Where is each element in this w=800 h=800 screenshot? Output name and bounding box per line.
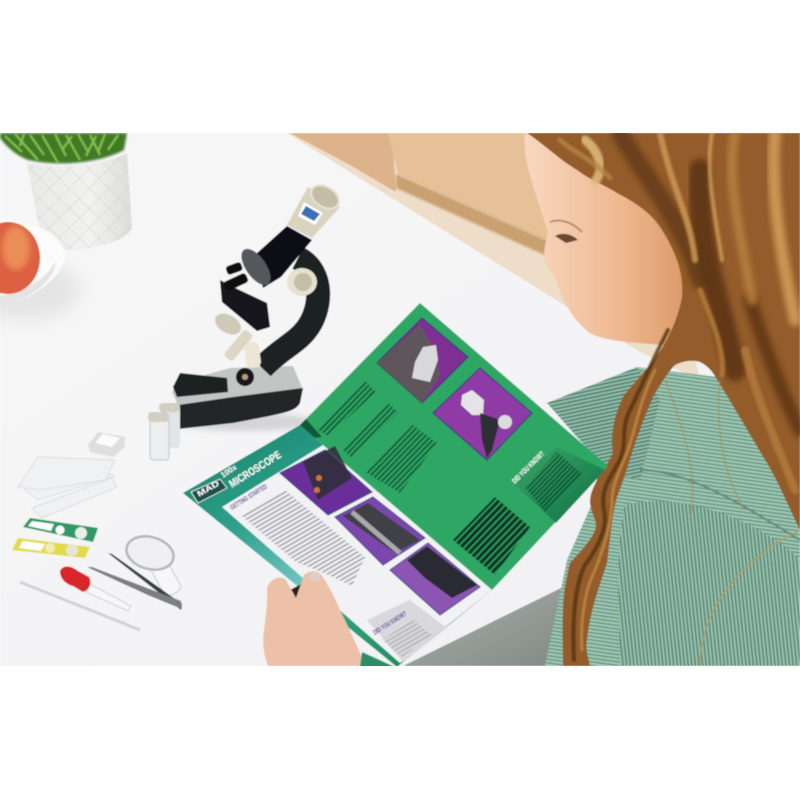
left page did you know box: DID YOU KNOW? (372, 611, 408, 637)
apple (0, 222, 40, 294)
sample vials (148, 403, 180, 460)
photo scene (0, 133, 800, 666)
plant (0, 133, 127, 163)
glass dropper (60, 566, 131, 611)
objective turret (224, 248, 272, 290)
booklet corner under hand (360, 652, 395, 667)
green sample slide (23, 518, 98, 542)
magnifying glass (123, 531, 181, 596)
hand holding booklet (263, 571, 363, 666)
booklet (183, 303, 608, 667)
booklet title: MICROSCOPE (227, 449, 284, 491)
clear glass slides (18, 457, 117, 518)
booklet title (219, 449, 284, 491)
face (524, 133, 684, 346)
plate (0, 219, 80, 320)
booklet brand logo: MAD (196, 479, 221, 499)
right page photo, eyepiece detail (433, 368, 532, 460)
grey cabinet below table edge (403, 587, 563, 666)
microscope tube (256, 226, 312, 288)
right page (300, 303, 608, 590)
thin hair wisps over sweater (665, 380, 745, 520)
yellow sample slide (12, 538, 90, 558)
right page did you know panel (510, 447, 605, 523)
white table top (0, 134, 716, 666)
focus knob (287, 268, 317, 296)
tweezers (87, 553, 182, 610)
hair strands (560, 133, 800, 660)
right page important note (453, 497, 530, 575)
right page photo, stage detail (377, 318, 468, 403)
getting started heading: GETTING STARTED (229, 484, 269, 512)
sweater (545, 367, 800, 666)
microscope base (172, 366, 303, 429)
lower knobs and clips (214, 313, 262, 368)
glass rod (20, 582, 140, 630)
slide cover box (88, 432, 125, 457)
right page paragraph 2 lines (343, 403, 398, 458)
eyepiece (287, 184, 340, 238)
right page paragraph 1 lines (318, 381, 376, 436)
left page body text lines (242, 490, 365, 586)
microscope arm (262, 258, 318, 368)
right page did you know panel: DID YOU KNOW? (510, 449, 546, 485)
left page photo 2 (335, 497, 425, 565)
booklet title: 100x (219, 463, 239, 480)
left page white panel (222, 445, 492, 663)
wooden floor and cabinet behind the table (287, 133, 700, 380)
microscope (172, 181, 343, 431)
booklet brand logo (191, 479, 227, 503)
left page (183, 425, 492, 667)
microscope stage (220, 280, 270, 331)
right page paragraph 3 lines (365, 425, 437, 493)
left page photo 1 (280, 446, 372, 515)
right page dark shadow by the fold (300, 419, 322, 438)
left page photo 3 (390, 543, 480, 615)
hair (527, 133, 800, 666)
left page did you know box (367, 600, 447, 662)
microscope shadow (175, 413, 315, 431)
plant pot (27, 153, 132, 250)
